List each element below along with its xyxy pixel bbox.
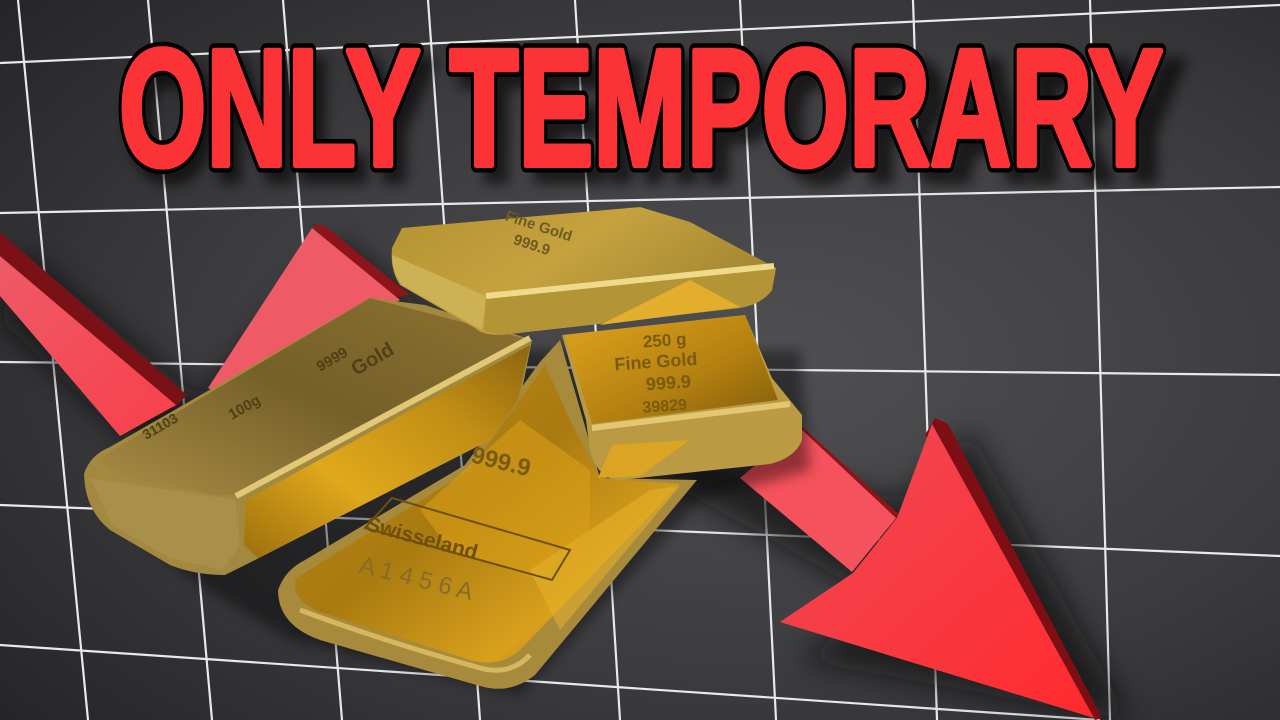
- arrow shadow: [0, 240, 1130, 720]
- right bar stamp: Fine Gold: [614, 349, 698, 375]
- left bar stamp: 100g: [226, 392, 264, 423]
- top bar stamp: Fine Gold: [503, 208, 574, 245]
- bottom bar stamp: [365, 498, 570, 580]
- right bar stamp: 250 g: [642, 330, 687, 351]
- left bar: [84, 298, 532, 575]
- gold bars: [84, 207, 810, 695]
- bottom bar: [278, 340, 697, 689]
- top bar stamp: 999.9: [511, 231, 552, 259]
- right bar stamp: 999.9: [645, 371, 692, 394]
- arrow shaft left: [0, 256, 176, 436]
- left bar stamp: 9999: [314, 344, 351, 375]
- arrow shaft right: [740, 428, 896, 572]
- right bar stamp: [612, 329, 701, 418]
- bar shadow: [100, 350, 810, 695]
- arrow head: [780, 424, 1094, 718]
- arrow side: [0, 232, 187, 408]
- title: [119, 16, 1163, 201]
- right bar stamp: 39829: [642, 397, 688, 417]
- left bar stamp: [140, 339, 398, 443]
- arrow rise: [208, 228, 400, 400]
- bottom bar: 999.9: [469, 442, 533, 482]
- right bar: [562, 315, 802, 480]
- top bar: [392, 207, 776, 335]
- left bar stamp: Gold: [348, 339, 398, 380]
- red down arrow: [0, 224, 1102, 720]
- left bar stamp: 31103: [140, 410, 181, 443]
- top bar stamp: [497, 208, 574, 264]
- bottom bar: A 1 4 5 6 A: [357, 552, 476, 606]
- bottom bar: Swisseland: [364, 513, 480, 564]
